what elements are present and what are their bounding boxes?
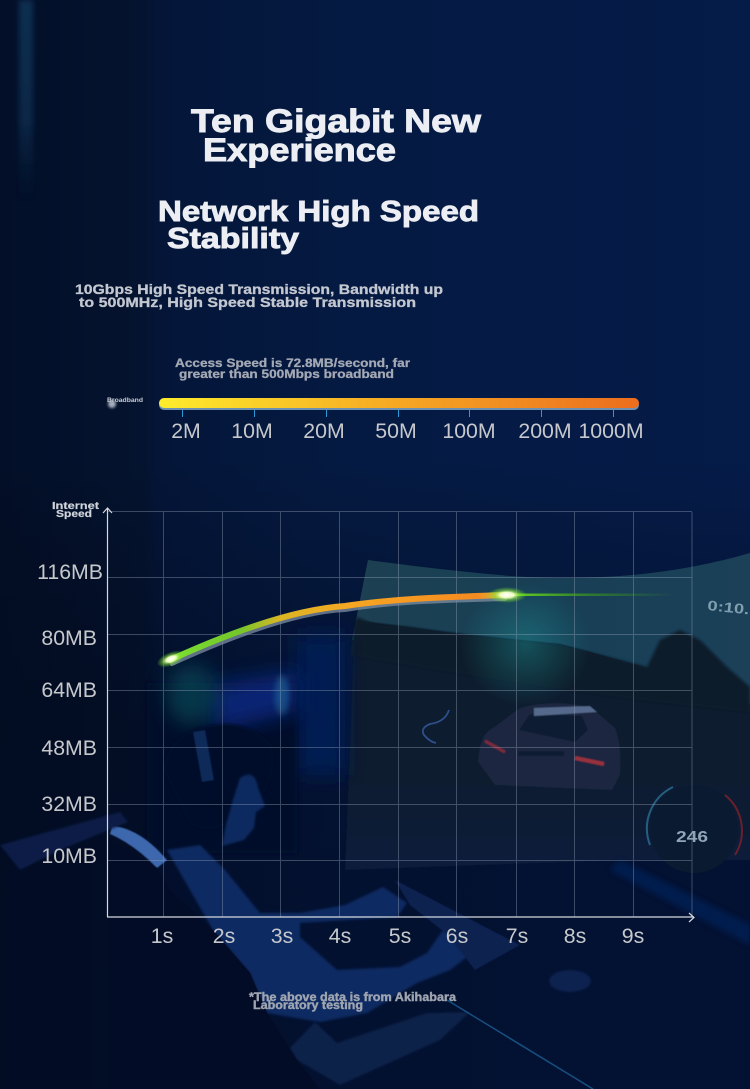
y axis title: Speed [56, 508, 92, 520]
y axis labels: 48MB [41, 736, 97, 760]
monitor ground [345, 620, 750, 870]
x axis labels: 2s [213, 924, 235, 948]
y axis title: Internet [52, 500, 100, 512]
hill line of trees [350, 617, 750, 712]
grid lines [107, 512, 692, 917]
x axis labels: 1s [151, 924, 173, 948]
teal light column [460, 583, 590, 707]
bar labels: 20M [303, 419, 345, 443]
minimap swirl [423, 710, 449, 743]
bar labels [171, 419, 644, 443]
headband [193, 730, 214, 782]
bar labels: 1000M [578, 419, 644, 443]
face [222, 775, 265, 846]
y axis with arrow [103, 508, 112, 917]
subtitle: Network High Speed [158, 196, 479, 228]
x axis with arrow [107, 913, 694, 922]
bar labels: 2M [171, 419, 201, 443]
y axis title [52, 500, 100, 520]
HUD timer: 0:10. [707, 597, 750, 617]
police car [478, 703, 620, 790]
footnote [249, 992, 457, 1012]
x axis labels: 9s [622, 924, 644, 948]
end flare [487, 587, 527, 603]
green tail [505, 594, 675, 596]
game monitor scene [345, 553, 750, 873]
footnote: Laboratory testing [253, 1000, 363, 1012]
title: Ten Gigabit New [191, 103, 481, 139]
head and headset [163, 724, 274, 829]
thigh [290, 1012, 470, 1085]
x axis labels: 8s [564, 924, 586, 948]
subtitle: Stability [167, 223, 299, 255]
description text [75, 281, 443, 310]
y axis labels: 10MB [41, 844, 97, 868]
speedometer: 246 [676, 829, 708, 846]
broadband label [107, 398, 143, 408]
keyboard [395, 880, 520, 970]
bar labels: 10M [231, 419, 273, 443]
footnote: *The above data is from Akihabara [249, 992, 457, 1004]
y axis labels: 80MB [41, 626, 97, 650]
bar labels: 100M [442, 419, 496, 443]
y axis labels [37, 560, 103, 868]
monitor sky [352, 553, 750, 704]
bar labels: 50M [375, 419, 417, 443]
subtitle [158, 196, 479, 255]
x axis labels: 5s [389, 924, 411, 948]
torso and upper arm [167, 845, 480, 1022]
broadband speed scale [107, 398, 644, 443]
y axis labels: 32MB [41, 792, 97, 816]
chair headrest [110, 826, 167, 868]
description text: to 500MHz, High Speed Stable Transmission [79, 294, 416, 310]
start flare [154, 647, 188, 671]
broadband label: Broadband [107, 398, 143, 404]
mouse [549, 970, 591, 992]
side keyboard [0, 812, 128, 870]
chair [108, 838, 320, 1089]
speedometer [647, 785, 742, 873]
y axis labels: 116MB [37, 560, 103, 584]
x axis labels [151, 924, 644, 948]
gamer at desk [0, 635, 750, 1089]
speed line chart [37, 500, 694, 948]
bar labels: 200M [518, 419, 572, 443]
blue screen glow [215, 672, 297, 732]
title: Experience [203, 132, 396, 168]
title [191, 103, 481, 168]
dark monitor behind gamer [147, 683, 297, 853]
desk far edge [610, 860, 750, 945]
bar ticks [182, 410, 614, 417]
x axis labels: 6s [446, 924, 468, 948]
teal light behind head [166, 665, 218, 725]
description text: 10Gbps High Speed Transmission, Bandwidth up [75, 281, 443, 297]
x axis labels: 7s [506, 924, 528, 948]
access speed note: greater than 500Mbps broadband [179, 367, 394, 381]
right blue panel behind gamer [297, 635, 345, 775]
desk edge line [447, 1000, 593, 1089]
access speed note: Access Speed is 72.8MB/second, far [175, 356, 410, 370]
y axis labels: 64MB [41, 678, 97, 702]
speed curve [154, 587, 675, 671]
gradient bar [159, 398, 639, 410]
access speed note [175, 356, 410, 381]
x axis labels: 4s [329, 924, 351, 948]
x axis labels: 3s [271, 924, 293, 948]
